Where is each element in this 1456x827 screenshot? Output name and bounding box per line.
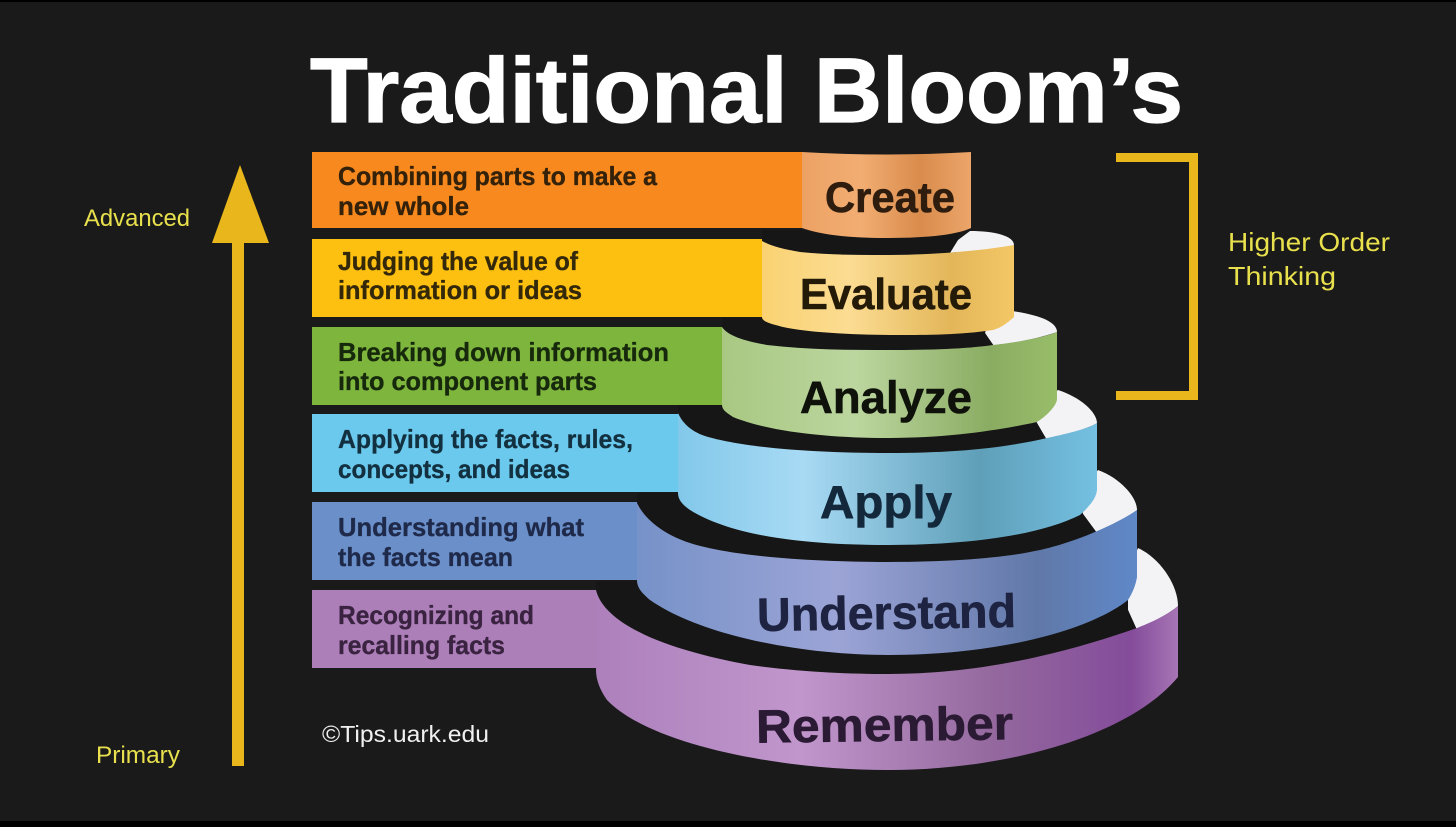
description: evaluate: information or ideas [338,275,582,305]
tier: remember [312,548,1178,770]
band: apply [678,413,1097,545]
label: analyze: Analyze [800,372,972,423]
bar: remember description [312,590,598,668]
band: remember [596,590,1178,770]
disc top: understand [1075,470,1137,533]
description: create: Combining parts to make a [338,161,658,191]
arrow: primary to advanced [212,165,269,766]
band: analyze [722,327,1057,438]
description: remember: Recognizing and [338,600,534,630]
title: Traditional Bloom’s [310,40,1183,142]
disc top: analyze [985,311,1057,346]
label: apply: Apply [820,476,952,528]
description: understand: the facts mean [338,542,513,572]
credit: ©Tips.uark.edu [322,721,489,747]
description: remember: recalling facts [338,630,505,660]
description: analyze: Breaking down information [338,337,669,367]
description: evaluate: Judging the value of [338,246,578,276]
disc top: apply [1030,390,1097,441]
band: understand [637,503,1137,655]
label: primary: Primary [96,742,180,769]
tier: create [312,152,971,238]
bar: create description [312,152,803,228]
band: evaluate [762,241,1014,335]
bracket: higher order thinking [1116,158,1194,396]
label: advanced: Advanced [84,205,190,232]
bar: evaluate description [312,239,763,317]
description: apply: concepts, and ideas [338,454,570,484]
bar: understand description [312,502,638,580]
label: evaluate: Evaluate [800,270,972,319]
description: analyze: into component parts [338,366,597,396]
tier: analyze [312,311,1057,438]
disc top: remember [1120,548,1178,630]
description: understand: Understanding what [338,512,584,542]
label: higher order thinking: Higher Order [1228,227,1390,257]
description: create: new whole [338,191,469,221]
label: remember: Remember [756,696,1013,753]
label: create: Create [825,174,955,222]
tier: apply [312,390,1097,545]
band: create [802,152,971,238]
description: apply: Applying the facts, rules, [338,424,633,454]
label: higher order thinking: Thinking [1228,261,1336,291]
bar: analyze description [312,327,723,405]
tier: evaluate [312,230,1014,335]
bar: apply description [312,414,679,492]
disc top: evaluate [945,231,1014,253]
tier: understand [312,470,1137,655]
label: understand: Understand [757,584,1016,641]
